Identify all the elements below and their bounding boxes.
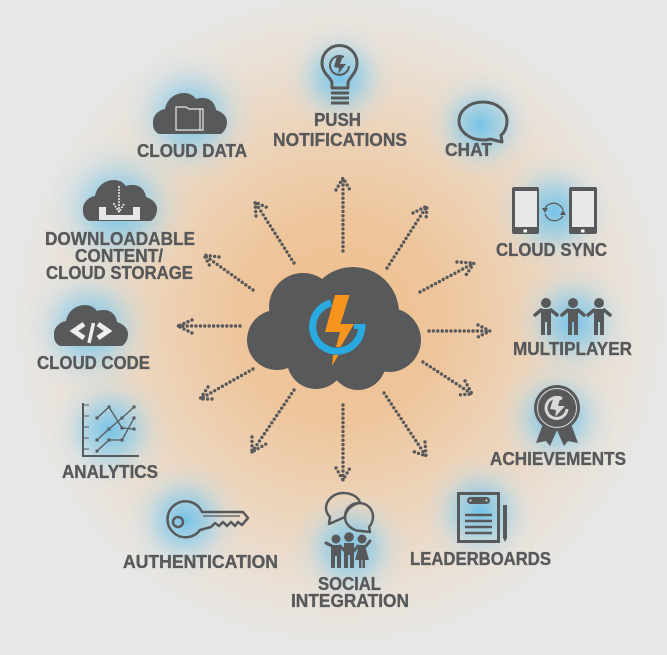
label: MULTIPLAYER bbox=[513, 339, 632, 359]
item: push notifications bbox=[273, 46, 407, 150]
icon: line chart bbox=[83, 403, 139, 456]
arrow: east-south-east bbox=[423, 362, 472, 395]
icon: cloud with download tray bbox=[83, 180, 157, 221]
icon: clipboard and pencil bbox=[458, 494, 507, 542]
item: cloud data bbox=[137, 93, 247, 161]
label bbox=[291, 574, 409, 611]
icon: ribbon badge bbox=[534, 385, 580, 446]
icon: speech bubble bbox=[459, 102, 507, 142]
icon: light bulb bbox=[322, 46, 357, 103]
icon: two phones with sync arrows bbox=[512, 187, 597, 234]
label: AUTHENTICATION bbox=[123, 552, 278, 572]
label: DOWNLOADABLE bbox=[45, 229, 195, 249]
label: SOCIAL bbox=[318, 574, 381, 594]
arrow: up bbox=[336, 178, 350, 251]
arrow: south-south-east bbox=[384, 393, 426, 456]
item: multiplayer bbox=[513, 298, 632, 359]
logo: blue ring and orange bolt bbox=[313, 295, 366, 366]
item: chat bbox=[445, 102, 507, 160]
label: LEADERBOARDS bbox=[410, 549, 551, 569]
item: analytics bbox=[62, 403, 158, 482]
arrow: west bbox=[178, 320, 240, 333]
arrow: north-west bbox=[255, 202, 294, 263]
arrow: west-north-west bbox=[204, 255, 253, 290]
label: ACHIEVEMENTS bbox=[490, 449, 626, 469]
label: CLOUD SYNC bbox=[496, 240, 607, 260]
label: ANALYTICS bbox=[62, 462, 158, 482]
label bbox=[45, 229, 195, 283]
icon: cloud with code symbol bbox=[54, 305, 128, 346]
central cloud with logo bbox=[247, 267, 421, 390]
item: achievements bbox=[490, 385, 626, 469]
item: downloadable content bbox=[45, 180, 195, 283]
icon: three people bbox=[535, 298, 610, 335]
arrow: north-east bbox=[387, 206, 427, 268]
label: CLOUD DATA bbox=[137, 141, 247, 161]
central cloud bbox=[247, 267, 421, 390]
label: CLOUD STORAGE bbox=[46, 263, 193, 283]
label: NOTIFICATIONS bbox=[273, 130, 407, 150]
item: leaderboards bbox=[410, 494, 551, 569]
arrow: south-south-west bbox=[252, 390, 294, 452]
icon: cloud with folder bbox=[153, 93, 227, 134]
label: CHAT bbox=[445, 140, 492, 160]
label: CLOUD CODE bbox=[37, 353, 150, 373]
label: PUSH bbox=[314, 110, 361, 130]
label: INTEGRATION bbox=[291, 591, 409, 611]
arrow: west-south-west bbox=[200, 369, 253, 399]
item: cloud sync bbox=[496, 187, 607, 260]
label: CONTENT/ bbox=[75, 246, 163, 266]
icon: key bbox=[168, 501, 248, 537]
item: social integration bbox=[291, 493, 409, 611]
arrow: east-north-east bbox=[420, 262, 474, 292]
item: authentication bbox=[123, 501, 278, 572]
arrow: east bbox=[429, 325, 490, 337]
item: cloud code bbox=[37, 305, 150, 373]
icon: speech bubbles and people bbox=[326, 493, 373, 568]
arrow: south bbox=[336, 405, 350, 480]
label bbox=[273, 110, 407, 150]
